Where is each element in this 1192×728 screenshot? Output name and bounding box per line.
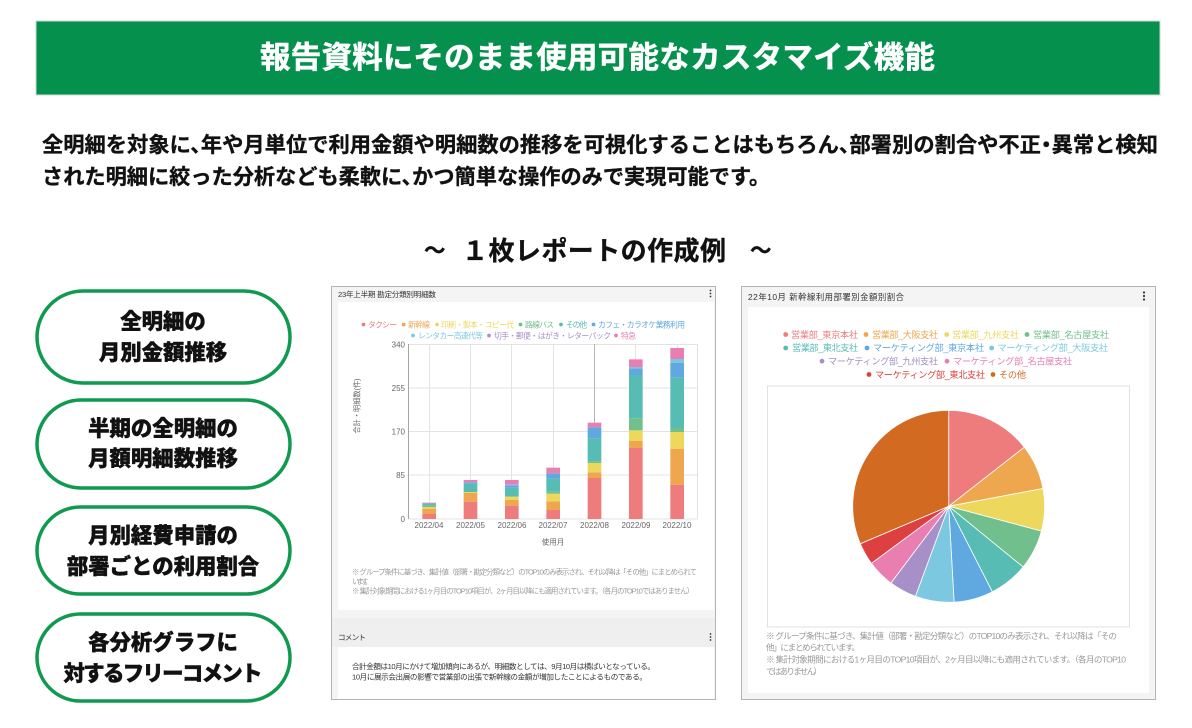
legend: bar chart: カフェ・カラオケ業務利用 xyxy=(598,320,685,330)
comment heading: コメント xyxy=(338,633,366,642)
subheading: １枚レポートの作成例 xyxy=(462,236,726,266)
comment text: 合計金額は10月にかけて増加傾向にあるが、明細数としては、9月10月は横ばいとなっている。 xyxy=(352,661,655,671)
panel title: pie chart: 22年10月 新幹線利用部署別金額別割合 xyxy=(748,292,905,302)
subheading: ～ xyxy=(424,239,446,263)
pill: monthly amount trend xyxy=(37,291,290,383)
comment text: 10月に展示会出展の影響で営業部の出張で新幹線の金額が増加したことによるものである。 xyxy=(352,672,647,682)
legend: bar chart xyxy=(362,320,685,340)
intro text xyxy=(42,133,1158,189)
legend: pie chart: マーケティング部_東北支社 xyxy=(875,369,985,380)
legend: pie chart: 営業部_九州支社 xyxy=(952,329,1019,340)
y axis labels: 170 xyxy=(392,428,406,436)
pill: half-year count trend: 月額明細数推移 xyxy=(88,447,238,471)
legend: bar chart: 路線バス xyxy=(525,320,554,330)
bar: 2022/09 xyxy=(629,359,643,519)
y axis labels: 340 xyxy=(392,340,406,350)
x axis labels: 2022/07 xyxy=(539,521,568,530)
notes: pie chart: ではありません） xyxy=(766,667,822,677)
legend: pie chart: 営業部_大阪支社 xyxy=(872,329,938,340)
y axis title: 合計・明細数(件) xyxy=(352,378,362,434)
notes: pie chart: ※ グループ条件に基づき、集計値（部署・勘定分類など）のTOP10のみ表示され、それ以降は「その xyxy=(766,630,1117,641)
x axis labels: 2022/08 xyxy=(580,521,610,530)
legend: bar chart: その他 xyxy=(566,320,587,330)
legend: pie chart: 営業部_東北支社 xyxy=(792,342,858,353)
bar: 2022/08 xyxy=(588,423,601,519)
notes: bar chart: ※ 集計対象期間における1ヶ月目のTOP10項目が、2ヶ月目以降にも適用されています。（各月のTOP10ではありません） xyxy=(352,586,694,596)
legend: pie chart: マーケティング部_名古屋支社 xyxy=(953,356,1072,366)
bar: 2022/05 xyxy=(464,480,477,519)
notes: bar chart xyxy=(352,568,697,596)
pill: half-year count trend xyxy=(37,400,290,488)
bar: 2022/06 xyxy=(505,480,519,519)
panel: pie chart report xyxy=(742,286,1156,700)
x axis labels xyxy=(415,521,692,530)
legend: pie chart: 営業部_名古屋支社 xyxy=(1033,329,1109,340)
chart grid and axes xyxy=(408,344,698,519)
x axis labels: 2022/04 xyxy=(415,521,444,530)
panel title: bar chart: 23年上半期 勘定分類別明細数 xyxy=(338,289,436,299)
pill: department share: 部署ごとの利用割合 xyxy=(67,554,260,579)
bar: 2022/04 xyxy=(422,503,436,519)
pill: free comment: 対するフリーコメント xyxy=(64,662,262,686)
pie chart xyxy=(853,410,1045,602)
pill: free comment: 各分析グラフに xyxy=(88,630,238,655)
menu icon: pie chart panel xyxy=(1143,291,1145,301)
legend: pie chart xyxy=(783,329,1109,380)
menu icon: bar chart panel xyxy=(710,290,711,297)
pill: half-year count trend: 半期の全明細の xyxy=(88,417,238,441)
legend: bar chart: 印刷・製本・コピー代 xyxy=(441,320,514,330)
comment section xyxy=(332,618,715,699)
plot frame xyxy=(768,386,1130,627)
y axis labels: 85 xyxy=(396,471,406,480)
legend: pie chart: その他 xyxy=(999,369,1026,380)
intro text: 全明細を対象に、年や月単位で利用金額や明細数の推移を可視化することはもちろん、部署別の割合や不正・異常と検知 xyxy=(42,133,1158,157)
stacked bars xyxy=(422,348,684,519)
legend: pie chart: 営業部_東京本社 xyxy=(791,329,858,340)
x axis title: 使用月 xyxy=(542,536,564,546)
intro text: された明細に絞った分析なども柔軟に、かつ簡単な操作のみで実現可能です。 xyxy=(42,165,770,189)
bar: 2022/10 xyxy=(670,348,684,519)
y axis labels: 0 xyxy=(401,515,406,524)
x axis labels: 2022/06 xyxy=(498,521,527,530)
legend: bar chart: レンタカー高速代等 xyxy=(418,330,483,340)
pill: department share: 月別経費申請の xyxy=(88,524,238,548)
title banner xyxy=(36,21,1160,95)
legend: bar chart: 新幹線 xyxy=(408,320,430,330)
subheading: ～ xyxy=(750,239,772,263)
notes: bar chart: ※ グループ条件に基づき、集計値（部署・勘定分類など）のTOP10のみ表示され、それ以降は「その他」にまとめられて xyxy=(352,568,697,576)
legend: bar chart: 特急 xyxy=(621,330,636,340)
bar: 2022/07 xyxy=(546,468,560,519)
notes: bar chart: います。 xyxy=(352,577,372,586)
pill: free comment xyxy=(37,614,290,701)
notes: pie chart: 他」にまとめられています。 xyxy=(766,642,860,653)
x axis labels: 2022/05 xyxy=(456,521,486,530)
legend: pie chart: マーケティング部_東京本社 xyxy=(873,342,984,353)
pill: monthly amount trend: 月別金額推移 xyxy=(99,341,227,365)
title banner: 報告資料にそのまま使用可能なカスタマイズ機能 xyxy=(260,40,935,75)
legend: pie chart: マーケティング部_九州支社 xyxy=(828,356,938,366)
legend: bar chart: 切手・郵便・はがき・レターパック xyxy=(494,330,611,340)
pill: monthly amount trend: 全明細の xyxy=(120,310,206,334)
x axis labels: 2022/09 xyxy=(622,521,651,530)
notes: pie chart xyxy=(766,630,1126,677)
pill: department share xyxy=(37,507,290,594)
menu icon: comment xyxy=(710,633,711,641)
notes: pie chart: ※ 集計対象期間における1ヶ月目のTOP10項目が、2ヶ月目以降にも適用されています。（各月のTOP10 xyxy=(766,653,1126,664)
comment text xyxy=(352,661,655,682)
y axis labels xyxy=(392,340,406,524)
x axis labels: 2022/10 xyxy=(663,521,692,530)
legend: pie chart: マーケティング部_大阪支社 xyxy=(998,342,1108,353)
legend: bar chart: タクシー xyxy=(368,320,397,330)
panel: bar chart report xyxy=(332,286,716,700)
y axis labels: 255 xyxy=(392,384,406,393)
